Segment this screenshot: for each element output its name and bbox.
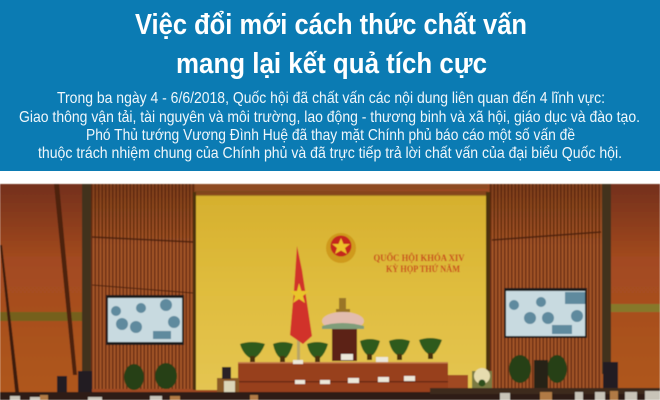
title <box>135 9 527 80</box>
large plants <box>124 355 567 390</box>
right wood panel <box>489 184 602 389</box>
intro text block <box>19 90 640 162</box>
flag <box>290 246 312 360</box>
left screen <box>106 295 184 345</box>
podium and tiers <box>217 354 492 400</box>
title: mang lại kết quả tích cực <box>176 48 487 80</box>
right screen <box>504 288 587 338</box>
session banner text: KỲ HỌP THỨ NĂM <box>386 264 460 274</box>
photo: National Assembly hall <box>0 184 660 400</box>
right wall <box>602 184 660 400</box>
bust and flower stand <box>322 298 364 361</box>
header panel <box>0 0 660 171</box>
session banner text: QUỐC HỘI KHÓA XIV <box>374 253 465 263</box>
audience row <box>0 388 660 400</box>
speaker at podium <box>222 367 231 379</box>
session banner text <box>374 253 465 274</box>
intro text block: Phó Thủ tướng Vương Đình Huệ đã thay mặt Chính phủ báo cáo một số vấn đề <box>86 127 575 144</box>
emblem <box>326 233 356 263</box>
left wall <box>0 184 91 400</box>
yellow back wall <box>193 184 490 390</box>
left wood panel <box>91 184 195 389</box>
guards <box>57 362 618 398</box>
title: Việc đổi mới cách thức chất vấn <box>135 9 527 41</box>
potted plants <box>240 338 442 362</box>
